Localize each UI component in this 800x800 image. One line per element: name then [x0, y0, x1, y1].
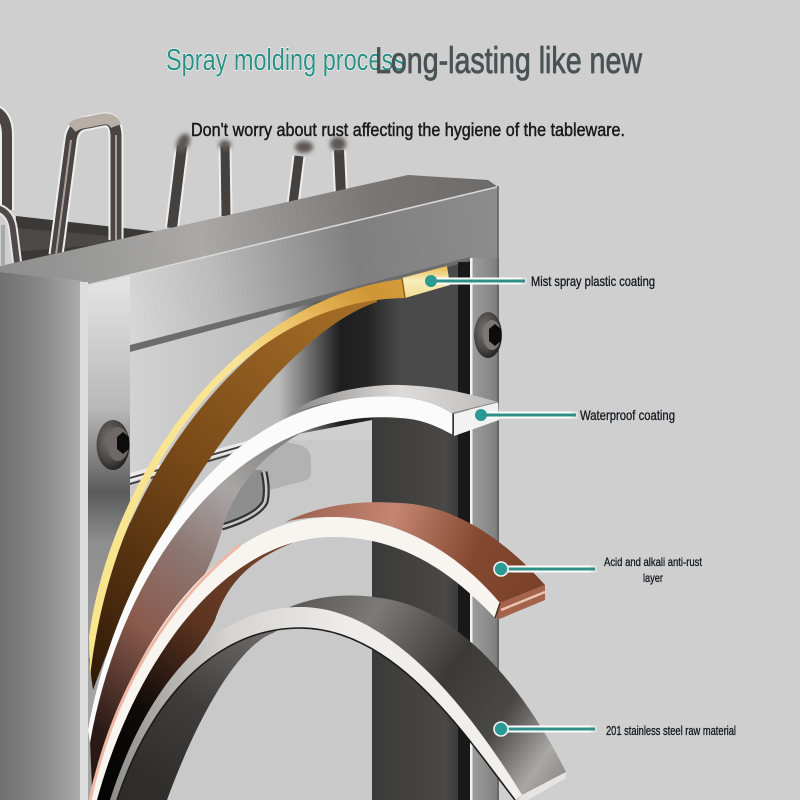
rack top face	[0, 175, 498, 284]
rack front band	[88, 187, 498, 360]
gold end cap	[402, 266, 450, 298]
bolt right	[474, 312, 502, 358]
heading: long-lasting like new: Long-lasting like new	[375, 40, 642, 81]
callout dot	[494, 722, 508, 736]
white arc: waterproof coating	[88, 385, 499, 790]
steel underside	[113, 618, 300, 800]
copper arc: acid and alkali anti-rust layer	[90, 502, 545, 800]
rack left face	[0, 272, 80, 800]
see-through opening	[130, 440, 373, 800]
callout dot	[494, 562, 508, 576]
callout dot	[425, 275, 437, 287]
copper top surface	[285, 502, 545, 603]
copper end cap	[497, 585, 545, 620]
heading: spray molding process: Spray molding process	[166, 42, 405, 77]
plate bottom ridges	[130, 440, 250, 482]
window interior	[130, 257, 470, 800]
copper underside	[92, 527, 333, 800]
steel end cap	[519, 772, 566, 800]
callout: acid and alkali anti-rust layer: Acid and alkali anti-rust	[604, 555, 703, 569]
rear plate	[130, 258, 470, 476]
white top surface	[285, 385, 498, 417]
callout dot	[475, 409, 487, 421]
steel strip	[110, 607, 522, 800]
white end cap	[454, 402, 499, 436]
rack left bar	[88, 275, 130, 800]
bolt left	[96, 420, 130, 470]
rear leg	[372, 418, 458, 800]
translucent hook	[225, 437, 311, 492]
callout: mist spray plastic coating	[425, 273, 655, 289]
steel arc: 201 stainless steel raw material	[110, 595, 566, 800]
copper pink edge	[90, 545, 240, 800]
gold arc: mist spray plastic coating	[89, 266, 450, 690]
rack right bar	[472, 258, 499, 800]
callout: acid and alkali anti-rust layer	[494, 555, 703, 585]
rack basket and wire hooks behind the frame	[0, 112, 346, 268]
callout: 201 stainless steel raw material	[494, 722, 736, 738]
subtitle: Don't worry about rust affecting the hygiene of the tableware.	[191, 120, 625, 140]
callout: mist spray plastic coating: Mist spray plastic coating	[531, 273, 655, 289]
callout: waterproof coating	[475, 407, 675, 423]
steel top surface	[277, 595, 566, 795]
callout: 201 stainless steel raw material: 201 stainless steel raw material	[606, 724, 736, 738]
white underside	[90, 412, 340, 790]
white strip	[88, 396, 453, 743]
callout: waterproof coating: Waterproof coating	[580, 407, 675, 423]
rack frame	[0, 175, 499, 800]
gold underside	[89, 292, 377, 690]
smudge under the subtitle	[173, 131, 346, 155]
copper strip	[90, 517, 500, 800]
callout: acid and alkali anti-rust layer: layer	[643, 571, 663, 585]
gold face strip	[89, 279, 405, 677]
